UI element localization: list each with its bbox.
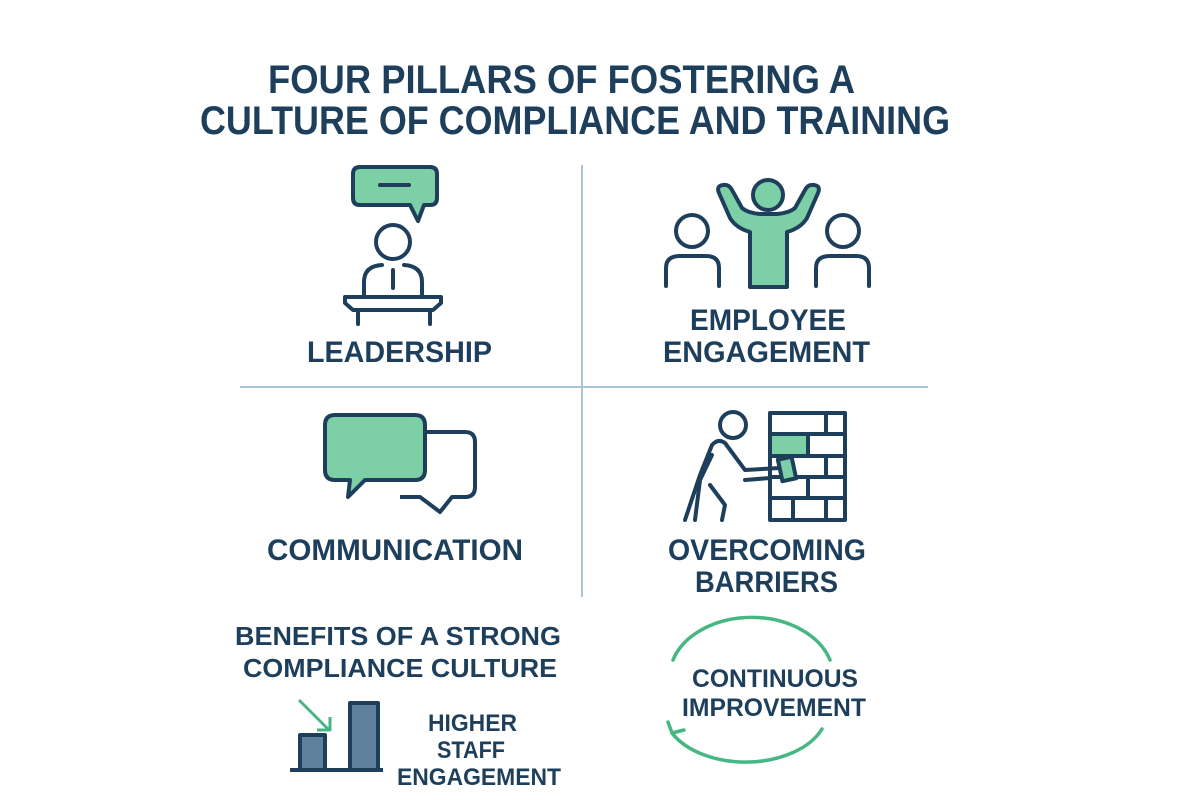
chart: bar chart with arrow — [290, 700, 383, 770]
panel: overcoming barriers — [668, 412, 866, 599]
icon: cycle arrows — [668, 617, 830, 762]
panel: benefits: STAFF — [437, 737, 505, 764]
panel: employee engagement — [663, 180, 870, 369]
title: FOUR PILLARS OF FOSTERING A — [268, 58, 855, 102]
panel: continuous improvement: IMPROVEMENT — [682, 694, 866, 722]
icon: speech bubbles — [325, 415, 475, 512]
icon: person building wall — [685, 412, 845, 520]
panel: benefits — [235, 621, 561, 791]
text: continuous improvement: CONTINUOUS — [692, 665, 858, 693]
panel: continuous improvement — [668, 617, 866, 762]
panel: benefits: ENGAGEMENT — [397, 764, 561, 791]
text: higher staff engagement: HIGHER — [428, 710, 517, 737]
panel: overcoming barriers: BARRIERS — [695, 566, 838, 599]
icon: speaker at podium — [345, 167, 441, 324]
panel: leadership — [307, 167, 492, 369]
icon: group with raised arms — [666, 180, 869, 287]
panel: communication — [267, 415, 523, 567]
heading: benefits: BENEFITS OF A STRONG — [235, 621, 561, 651]
title — [200, 58, 950, 143]
label: employee engagement: EMPLOYEE — [690, 304, 846, 337]
panel: employee engagement: ENGAGEMENT — [663, 336, 870, 369]
label: leadership: LEADERSHIP — [307, 336, 492, 369]
label: communication: COMMUNICATION — [267, 534, 523, 567]
title: CULTURE OF COMPLIANCE AND TRAINING — [200, 99, 950, 143]
label: overcoming barriers: OVERCOMING — [668, 534, 866, 567]
panel: benefits: COMPLIANCE CULTURE — [243, 653, 557, 683]
